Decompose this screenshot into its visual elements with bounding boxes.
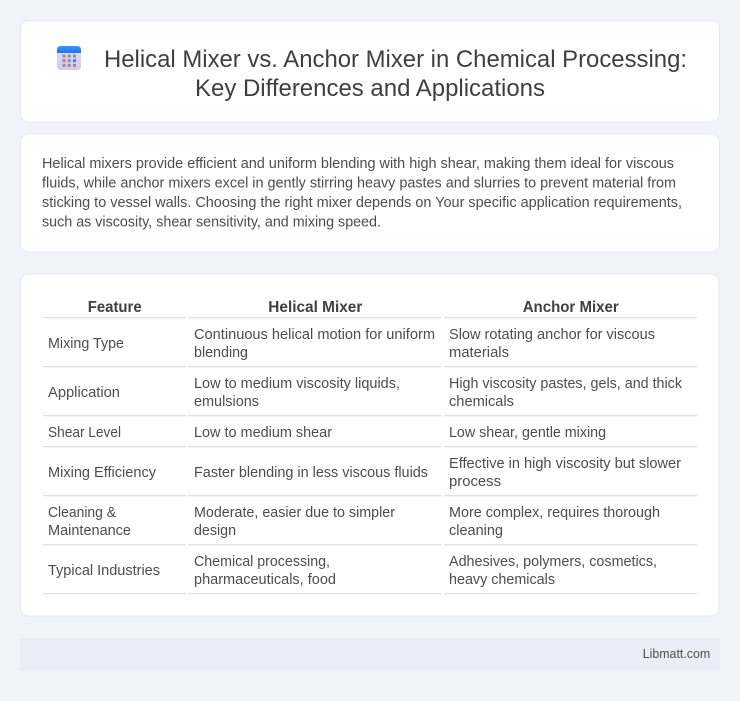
text block: summary paragraph: such as viscosity, shear sensitivity, and mixing speed. [42, 214, 381, 230]
table row: mixing type: Mixing Type [48, 336, 124, 352]
table row: mixing efficiency: Faster blending in less viscous fluids [194, 465, 428, 481]
table header row [43, 299, 697, 318]
footer credit: Libmatt.com [643, 646, 710, 661]
panel: introduction [20, 134, 720, 252]
table row: application: High viscosity pastes, gels, and thick [449, 376, 683, 392]
panel: title card [20, 20, 720, 122]
table row: mixing type: Slow rotating anchor for viscous [449, 327, 655, 343]
title: Key Differences and Applications [195, 75, 545, 102]
table row: cleaning and maintenance [43, 505, 697, 545]
table header row: Feature [88, 299, 142, 316]
text block: summary paragraph: sticking to vessel walls. Choosing the right mixer depends on Your specific application requirements, [42, 195, 682, 211]
table row: mixing type [43, 327, 697, 367]
table row: typical industries: pharmaceuticals, food [194, 572, 336, 588]
table row: mixing efficiency: process [449, 474, 501, 490]
table row: mixing efficiency: Mixing Efficiency [48, 465, 157, 481]
table row: application: emulsions [194, 394, 259, 410]
icon: calendar grid [57, 46, 81, 70]
text block: summary paragraph: fluids, while anchor mixers excel in gently stirring heavy pastes and slurries to prevent material from [42, 176, 676, 192]
table row: typical industries: Chemical processing, [194, 554, 330, 570]
text block: summary paragraph: Helical mixers provide efficient and uniform blending with high shear, making them ideal for viscous [42, 156, 674, 172]
table header row: Helical Mixer [268, 299, 362, 316]
table row: shear level: Shear Level [48, 425, 121, 441]
table row: application: Application [48, 385, 120, 401]
table row: mixing efficiency [43, 456, 697, 496]
table row: mixing efficiency: Effective in high viscosity but slower [449, 456, 681, 472]
title: Helical Mixer vs. Anchor Mixer in Chemical Processing: [104, 46, 687, 73]
table row: cleaning and maintenance: cleaning [449, 523, 503, 539]
panel: comparison table [20, 274, 719, 616]
table row: shear level: Low shear, gentle mixing [449, 425, 606, 441]
table row: mixing type: blending [194, 345, 248, 361]
table header row: Anchor Mixer [523, 299, 619, 316]
table row: shear level: Low to medium shear [194, 425, 332, 441]
table row: application [43, 376, 697, 416]
table row: typical industries: heavy chemicals [449, 572, 555, 588]
table row: cleaning and maintenance: design [194, 523, 236, 539]
table row: application: chemicals [449, 394, 514, 410]
title [104, 46, 687, 102]
table row: typical industries: Typical Industries [48, 563, 160, 579]
table row: cleaning and maintenance: More complex, requires thorough [449, 505, 660, 521]
table row: cleaning and maintenance: Maintenance [48, 523, 131, 539]
table row: typical industries: Adhesives, polymers, cosmetics, [449, 554, 657, 570]
text block: summary paragraph [42, 156, 682, 230]
table row: application: Low to medium viscosity liquids, [194, 376, 400, 392]
table row: mixing type: Continuous helical motion for uniform [194, 327, 435, 343]
table row: cleaning and maintenance: Cleaning & [48, 505, 116, 521]
table row: cleaning and maintenance: Moderate, easier due to simpler [194, 505, 395, 521]
footer band [20, 638, 720, 671]
table row: shear level [43, 425, 697, 447]
table row: mixing type: materials [449, 345, 509, 361]
table row: typical industries [43, 554, 697, 594]
